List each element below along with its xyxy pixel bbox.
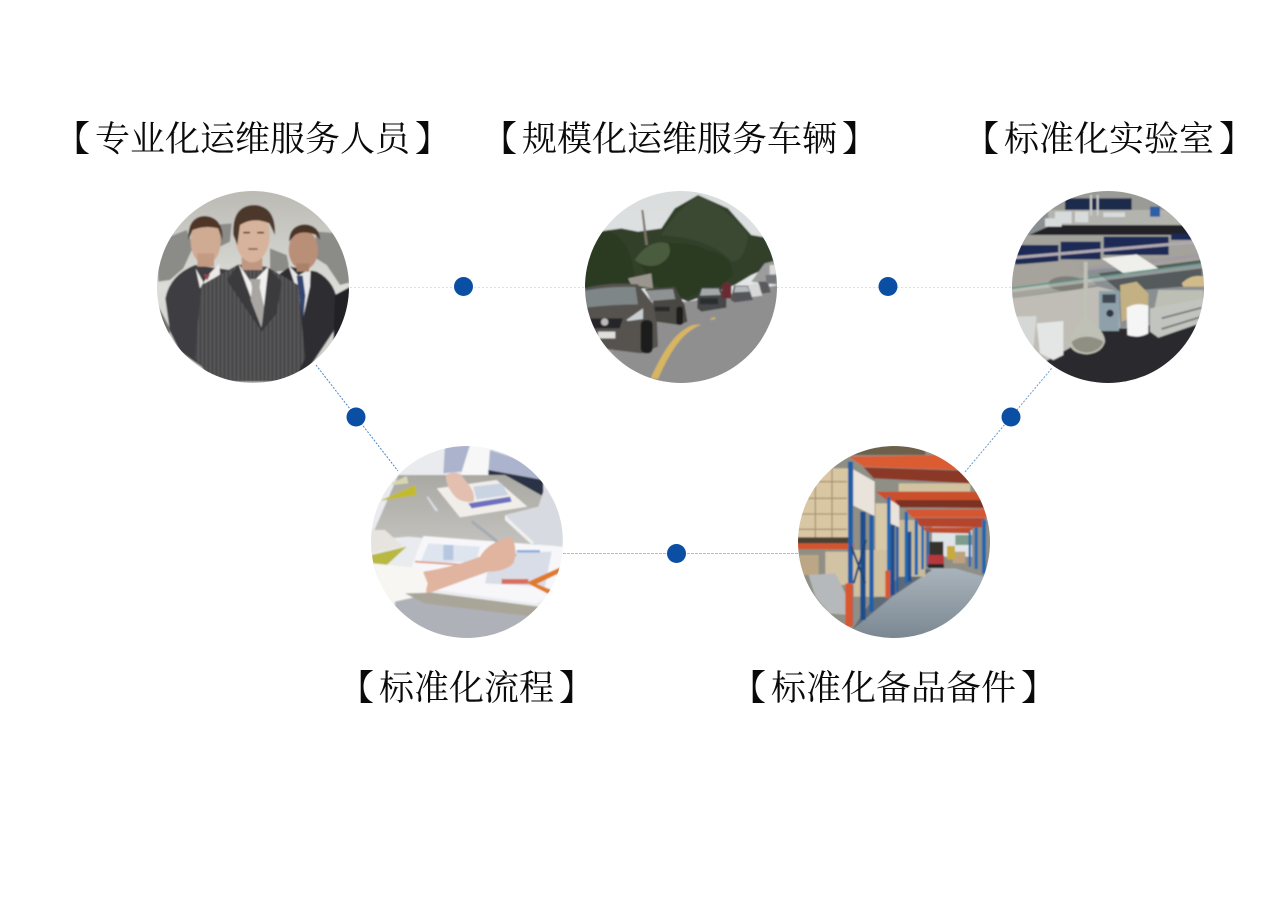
rack goods left <box>797 468 849 540</box>
pen <box>471 520 517 557</box>
left man <box>164 264 230 366</box>
node dot: bottom <box>667 544 686 563</box>
center goods <box>874 502 888 551</box>
connector: people to process <box>316 365 398 471</box>
photo circle: paperwork on desk <box>371 446 563 638</box>
controller <box>1099 291 1119 331</box>
tablet on desk <box>437 480 527 517</box>
photo circle: business team <box>157 191 349 383</box>
flask <box>1069 262 1105 354</box>
infographic canvas <box>76 120 1232 703</box>
node dot: middle left <box>346 408 366 426</box>
connector: process to spare parts <box>563 552 799 554</box>
heading: laboratory: 【标准化实验室】 <box>964 120 1254 159</box>
node dot: top right <box>878 277 898 296</box>
specimens <box>1120 282 1148 322</box>
tube rack <box>1150 298 1205 338</box>
paper roll <box>1127 304 1148 337</box>
heading: spare parts: 【标准化备品备件】 <box>731 669 1056 708</box>
lead car <box>585 284 658 353</box>
second car <box>645 287 687 325</box>
center man <box>195 264 305 382</box>
node dot: middle right <box>1002 408 1020 426</box>
photo circle: laboratory bench <box>1012 191 1204 383</box>
heading: professional staff: 【专业化运维服务人员】 <box>55 120 450 159</box>
desk front <box>394 596 528 638</box>
lane marking <box>651 324 701 379</box>
floor <box>856 567 984 638</box>
laptop <box>505 487 563 547</box>
overhead beams <box>849 455 962 470</box>
node dot: top left <box>454 277 473 296</box>
photo circle: warehouse racks <box>798 446 990 638</box>
heading: service vehicles: 【规模化运维服务车辆】 <box>482 120 877 159</box>
right man <box>277 267 338 375</box>
hot plate <box>1012 260 1097 298</box>
rack signs <box>853 469 875 516</box>
beakers <box>1015 316 1037 348</box>
orange ruler <box>526 567 562 594</box>
heading: process: 【标准化流程】 <box>339 669 594 708</box>
distant cars <box>731 286 753 302</box>
documents <box>412 536 563 603</box>
counter <box>1012 286 1126 362</box>
forklift <box>929 542 943 556</box>
connector: spare parts to laboratory <box>965 368 1052 472</box>
arm <box>423 537 515 594</box>
connector: people to vehicles <box>350 286 585 288</box>
photo circle: vehicles on road <box>585 191 777 383</box>
connector: vehicles to laboratory <box>777 286 1013 288</box>
blue uprights <box>848 462 853 625</box>
third car <box>697 287 726 312</box>
